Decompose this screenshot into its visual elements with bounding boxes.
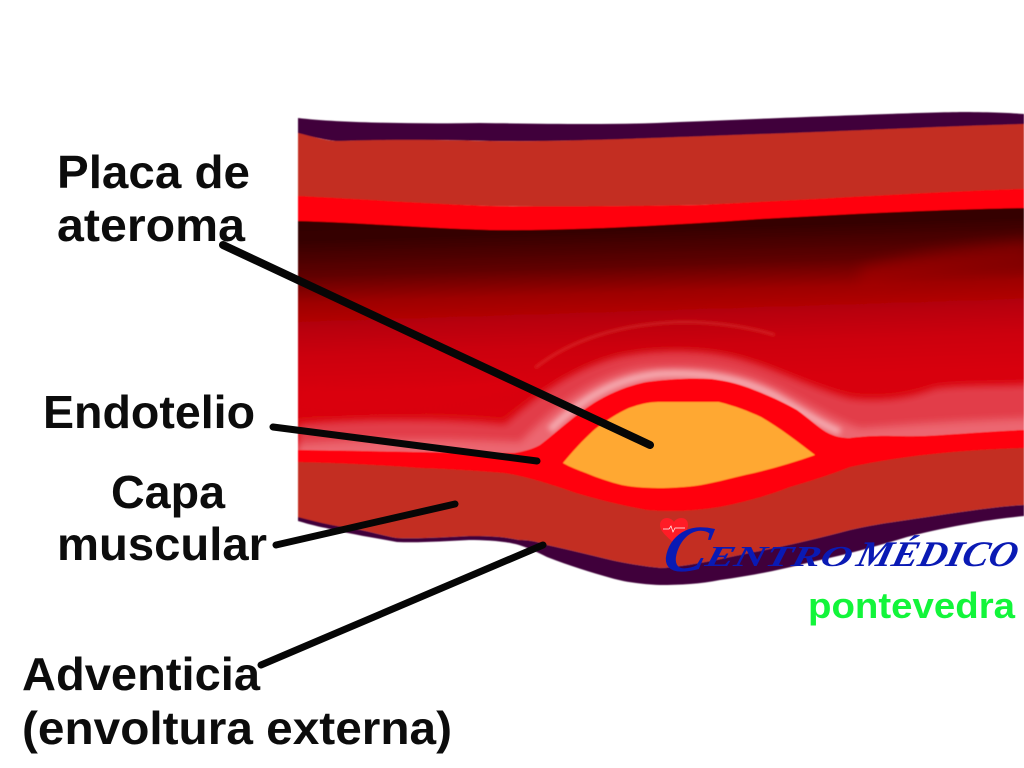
logo text: centro medico [656,513,1023,586]
label: capa muscular: Capa [111,466,225,518]
leader line: endotelio [273,427,537,461]
logo text: centro medico: MÉDICO [852,534,1023,574]
label: adventicia: Adventicia [22,648,260,700]
logo: centro medico pontevedra [656,513,1023,626]
lumen gradient [298,198,1024,458]
leader line: placa de ateroma [223,245,650,445]
lumen shading bands [298,240,1024,460]
label: adventicia [22,648,452,754]
label: placa de ateroma: Placa de [57,146,250,198]
icon: heart with pulse [660,518,688,543]
pale halo around endothelium [298,351,1024,460]
label: capa muscular: muscular [57,518,267,570]
lower muscular layer [298,440,1024,568]
leader line: adventicia [261,545,543,665]
atheroma plaque [563,402,815,488]
logo text: pontevedra: pontevedra [808,585,1016,626]
label: adventicia: (envoltura externa) [22,702,452,754]
label: capa muscular [57,466,267,570]
artery wall and lumen [298,112,1024,585]
leader line: capa muscular [276,504,455,545]
lower endothelium and plaque cap [298,379,1024,511]
logo text: centro medico: ENTRO [701,541,856,573]
label: endotelio: Endotelio [43,386,255,438]
adventicia upper band [298,112,1024,141]
upper endothelium [298,189,1024,230]
logo text: centro medico: C [656,513,720,586]
lower adventicia [298,505,1024,585]
label: placa de ateroma [57,146,250,251]
upper muscular layer [298,124,1024,207]
label: placa de ateroma: ateroma [57,199,245,251]
